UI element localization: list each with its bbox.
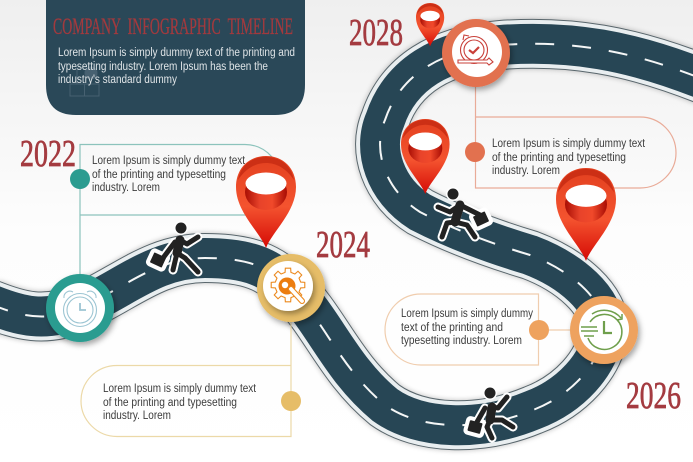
panel: 2022 (70, 144, 281, 276)
pin: small top (416, 3, 444, 46)
header text (58, 47, 295, 86)
dot: 2026 (529, 320, 549, 340)
year: 2022: 2022 (20, 133, 76, 175)
icon: alarm clock (64, 291, 96, 326)
header text: industry's standard dummy (58, 74, 177, 86)
pin: 2028 road (401, 119, 450, 194)
text: 2026: text of the printing and (401, 322, 503, 334)
text: 2022 (92, 155, 246, 194)
header text: Lorem Ipsum is simply dummy text of the printing and (58, 47, 295, 59)
text: 2024 (103, 383, 257, 422)
faded header icon (70, 67, 99, 96)
header panel (46, 0, 305, 115)
pin: large 2022 (236, 156, 296, 248)
year: 2028: 2028 (349, 12, 403, 54)
icon: cycle check (458, 35, 493, 65)
runner: middle (438, 187, 489, 237)
icon: fast clock (581, 310, 622, 349)
node: 2024 gear (257, 254, 325, 322)
dot: 2028 (465, 142, 485, 162)
pin: large 2026 (556, 168, 616, 261)
node: 2026 clock arrows (570, 296, 638, 364)
icon: gear and wrench (271, 268, 305, 302)
panel: 2026 (385, 294, 580, 365)
dot: 2022 (70, 169, 90, 189)
runner: upper left (150, 221, 198, 272)
panel: 2028 (465, 84, 676, 188)
text: 2028: industry. Lorem (492, 165, 560, 177)
text: 2024: of the printing and typesetting (103, 397, 237, 409)
text: 2026: Lorem Ipsum is simply dummy (401, 308, 533, 320)
text: 2024: Lorem Ipsum is simply dummy text (103, 383, 257, 395)
text: 2022: of the printing and typesetting (92, 169, 226, 181)
text: 2022: Lorem Ipsum is simply dummy text (92, 155, 246, 167)
panel: 2024 (81, 320, 301, 436)
text: 2028: Lorem Ipsum is simply dummy text (492, 138, 646, 150)
node: 2022 clock (46, 274, 114, 342)
text: 2024: industry. Lorem (103, 410, 171, 422)
text: 2022: industry. Lorem (92, 182, 160, 194)
text: 2028 (492, 138, 646, 177)
text: 2026 (401, 308, 533, 347)
text: 2028: of the printing and typesetting (492, 152, 626, 164)
title: COMPANY INFOGRAPHIC TIMELINE (53, 14, 293, 39)
year: 2024: 2024 (316, 224, 370, 266)
runner: bottom (468, 386, 513, 438)
dot: 2024 (281, 391, 301, 411)
node: 2028 target arrow (442, 19, 510, 87)
text: 2026: typesetting industry. Lorem (401, 335, 522, 347)
header text: typesetting industry. Lorem Ipsum has been the (58, 61, 268, 73)
